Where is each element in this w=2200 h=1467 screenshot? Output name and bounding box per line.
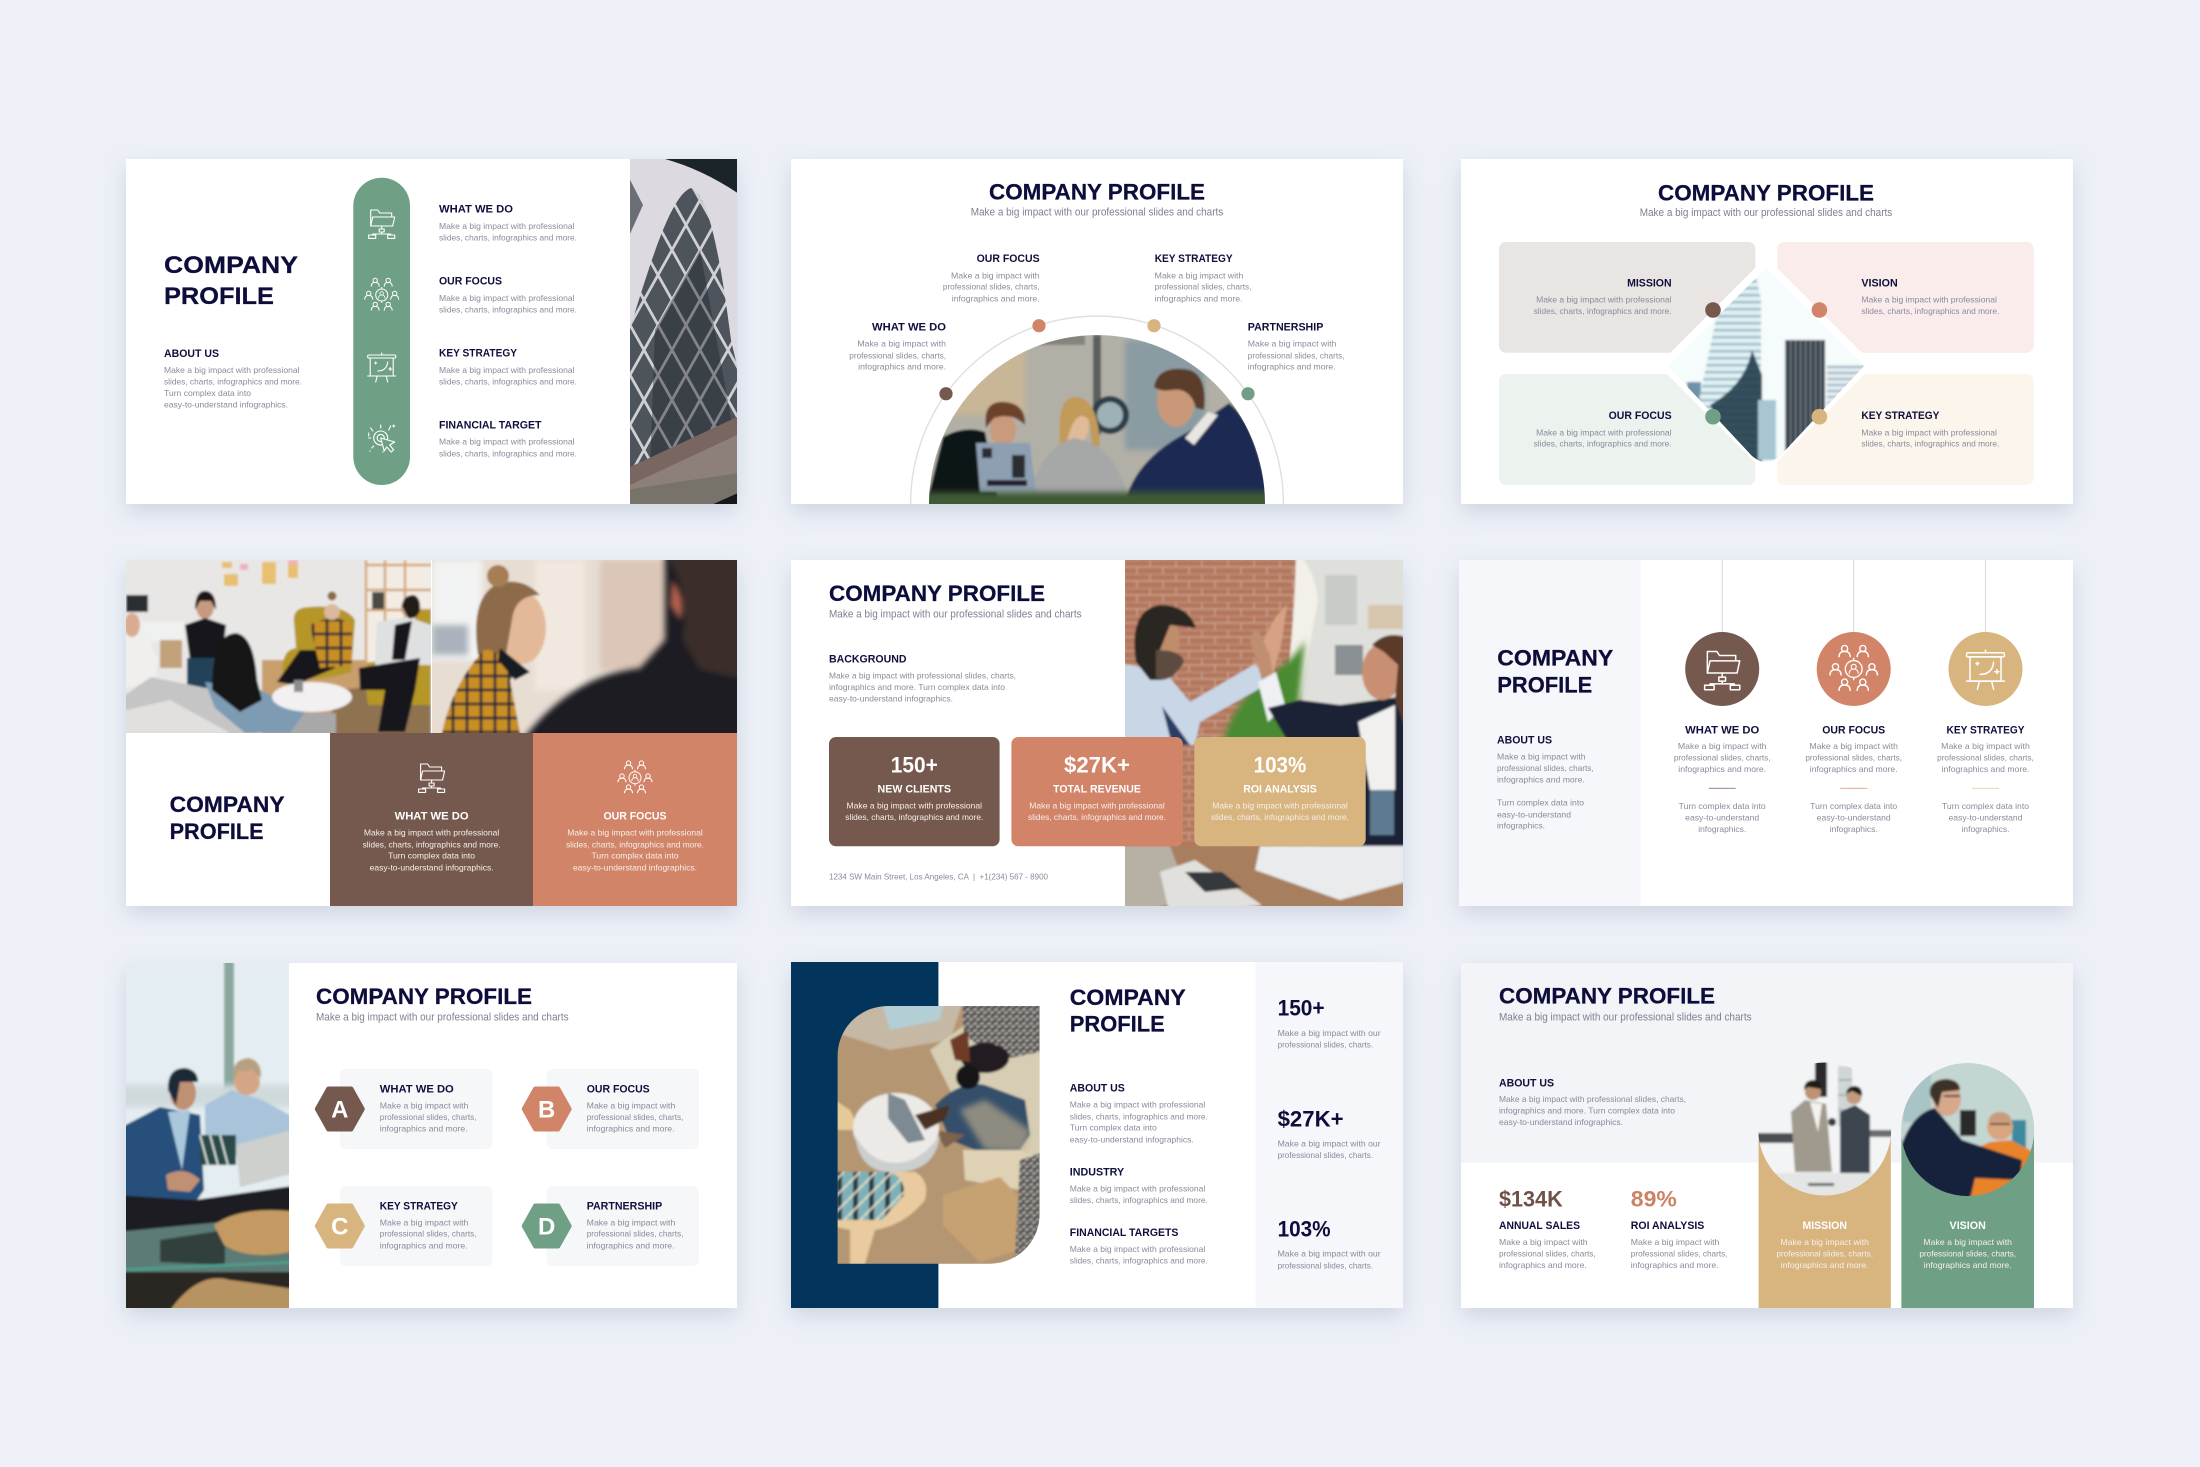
title: COMPANY PROFILE bbox=[316, 984, 532, 1009]
text block: about us: Make a big impact with bbox=[1497, 751, 1586, 761]
text block: background bbox=[829, 653, 1016, 704]
column: mission: professional slides, charts, bbox=[1776, 1248, 1873, 1258]
text block: about us: easy-to-understand infographics. bbox=[1499, 1117, 1623, 1127]
text block: what we do bbox=[439, 204, 577, 243]
panel: our focus: easy-to-understand infographics. bbox=[573, 862, 697, 872]
text block: mission bbox=[1534, 278, 1672, 316]
text block: our focus: infographics and more. bbox=[952, 293, 1040, 303]
stat: annual sales: ANNUAL SALES bbox=[1499, 1220, 1580, 1232]
text block: partnership bbox=[1248, 321, 1344, 372]
text block: key strategy: KEY STRATEGY bbox=[1861, 410, 1940, 422]
column: vision: Make a big impact with bbox=[1923, 1237, 2012, 1247]
text block: key strategy: professional slides, charts, bbox=[1155, 282, 1251, 292]
text block: our focus: professional slides, charts, bbox=[943, 282, 1040, 292]
panel: our focus: slides, charts, infographics and more. bbox=[566, 839, 704, 849]
slide 2: arc with photo bbox=[791, 159, 1403, 515]
right stats panel bbox=[1256, 962, 1403, 1308]
panel: what we do: Make a big impact with professional bbox=[364, 828, 499, 838]
photo: team at laptop bbox=[929, 335, 1265, 504]
panel: our focus: OUR FOCUS bbox=[604, 811, 666, 823]
diamond dots bbox=[1705, 302, 1827, 425]
text block: partnership: PARTNERSHIP bbox=[1248, 321, 1323, 333]
text block: industry: Make a big impact with professional bbox=[1070, 1183, 1205, 1193]
photo: office meeting bbox=[126, 560, 431, 733]
text block: about us bbox=[1499, 1078, 1686, 1127]
title: PROFILE bbox=[1070, 1012, 1165, 1037]
stat: $27K+: professional slides, charts. bbox=[1278, 1150, 1373, 1160]
text block: about us: Turn complex data into bbox=[1070, 1123, 1157, 1133]
stat: roi analysis: professional slides, charts, bbox=[1631, 1248, 1728, 1258]
column: what we do bbox=[1674, 560, 1771, 834]
stat: 103%: Make a big impact with our bbox=[1278, 1249, 1381, 1259]
photo: skyscraper bbox=[630, 159, 737, 504]
stat: 103% bbox=[1278, 1217, 1381, 1270]
text block: about us bbox=[1497, 735, 1594, 831]
text block: our focus: slides, charts, infographics and more. bbox=[1534, 439, 1672, 449]
text block: what we do: professional slides, charts, bbox=[849, 350, 946, 360]
title: Make a big impact with our professional slides and charts bbox=[971, 206, 1223, 218]
arc dots bbox=[939, 319, 1255, 400]
green pill with icons bbox=[353, 178, 410, 485]
card D: professional slides, charts, bbox=[587, 1229, 683, 1239]
text block: background: easy-to-understand infographics. bbox=[829, 694, 953, 704]
stat: annual sales: professional slides, charts, bbox=[1499, 1248, 1596, 1258]
panel: what we do: slides, charts, infographics and more. bbox=[363, 839, 501, 849]
card A: professional slides, charts, bbox=[380, 1112, 476, 1122]
text block: key strategy: Make a big impact with professional bbox=[439, 365, 575, 375]
title bbox=[164, 252, 298, 310]
text block: our focus: Make a big impact with bbox=[951, 270, 1040, 280]
white diamond bbox=[1658, 257, 1874, 473]
slide 5: stat cards bbox=[791, 550, 1413, 916]
stat: annual sales bbox=[1499, 1187, 1596, 1270]
column: vision bbox=[1901, 1063, 2034, 1308]
text block: background: infographics and more. Turn complex data into bbox=[829, 682, 1005, 692]
text block: about us: Make a big impact with professional bbox=[1070, 1100, 1205, 1110]
text block: mission: slides, charts, infographics and more. bbox=[1534, 306, 1672, 316]
card A: infographics and more. bbox=[380, 1124, 468, 1134]
text block: about us: Turn complex data into bbox=[164, 388, 251, 398]
card C: infographics and more. bbox=[380, 1240, 468, 1250]
column: our focus: OUR FOCUS bbox=[1822, 724, 1885, 736]
text block: mission: MISSION bbox=[1627, 278, 1672, 290]
stat: roi analysis: 89% bbox=[1631, 1187, 1677, 1212]
card D: D bbox=[538, 1214, 555, 1240]
column: what we do: infographics and more. bbox=[1678, 764, 1766, 774]
text block: what we do: infographics and more. bbox=[858, 362, 946, 372]
navy band bbox=[791, 962, 938, 1308]
photo: high five bbox=[1125, 560, 1403, 906]
title bbox=[316, 984, 569, 1024]
text block: about us: Turn complex data into bbox=[1497, 798, 1584, 808]
text block: vision: slides, charts, infographics and more. bbox=[1861, 306, 1999, 316]
card B bbox=[524, 1069, 699, 1149]
title bbox=[1499, 984, 1752, 1023]
stat: 103%: professional slides, charts. bbox=[1278, 1260, 1373, 1270]
card: total revenue: Make a big impact with professional bbox=[1029, 800, 1165, 810]
card D: PARTNERSHIP bbox=[587, 1201, 662, 1213]
column: mission bbox=[1758, 1062, 1892, 1308]
title: PROFILE bbox=[164, 283, 274, 310]
photo: man at laptop from above bbox=[838, 1006, 1040, 1264]
footer address: 1234 SW Main Street, Los Angeles, CA | +1(234) 567 - 8900 bbox=[829, 871, 1048, 881]
panel: what we do: Turn complex data into bbox=[388, 851, 475, 861]
card C: KEY STRATEGY bbox=[380, 1201, 458, 1213]
title: PROFILE bbox=[170, 819, 264, 844]
stat: roi analysis: Make a big impact with bbox=[1631, 1237, 1720, 1247]
text block: financial targets: Make a big impact with professional bbox=[1070, 1244, 1205, 1254]
text block: about us: slides, charts, infographics and more. bbox=[1070, 1111, 1208, 1121]
stat: roi analysis: infographics and more. bbox=[1631, 1260, 1719, 1270]
text block: financial target bbox=[439, 420, 577, 458]
photo: handshake in office bbox=[1758, 1062, 1892, 1196]
text block: key strategy: slides, charts, infographics and more. bbox=[1861, 439, 1999, 449]
text block: our focus: OUR FOCUS bbox=[977, 253, 1040, 265]
text block: financial targets: slides, charts, infographics and more. bbox=[1070, 1256, 1208, 1266]
card D: infographics and more. bbox=[587, 1240, 674, 1250]
text block: industry bbox=[1070, 1166, 1208, 1205]
card: total revenue: slides, charts, infographics and more. bbox=[1028, 812, 1166, 822]
text block: key strategy: KEY STRATEGY bbox=[1155, 253, 1233, 265]
text block: financial targets bbox=[1070, 1227, 1208, 1266]
text block: about us: slides, charts, infographics and more. bbox=[164, 376, 302, 386]
column: our focus: Turn complex data into bbox=[1810, 801, 1897, 811]
panel: what we do: WHAT WE DO bbox=[395, 811, 469, 823]
text block: about us: Make a big impact with professional slides, charts, bbox=[1499, 1094, 1686, 1104]
stat: $27K+ bbox=[1278, 1107, 1381, 1160]
text block: what we do: Make a big impact with bbox=[857, 339, 946, 349]
arc bbox=[911, 316, 1283, 504]
text block: about us: easy-to-understand infographics. bbox=[164, 400, 288, 410]
column: our focus: easy-to-understand bbox=[1817, 813, 1891, 823]
slide 8: navy band with photo bbox=[791, 962, 1403, 1316]
text block: industry: slides, charts, infographics and more. bbox=[1070, 1195, 1208, 1205]
column: our focus bbox=[1805, 560, 1902, 834]
stat: 150+ bbox=[1278, 996, 1381, 1050]
column: vision: professional slides, charts, bbox=[1919, 1248, 2016, 1258]
card A: A bbox=[331, 1096, 348, 1124]
stat: 150+: Make a big impact with our bbox=[1278, 1028, 1381, 1038]
text block: about us: Make a big impact with professional bbox=[164, 365, 300, 375]
column: key strategy: KEY STRATEGY bbox=[1946, 724, 2025, 736]
stat: 150+: professional slides, charts. bbox=[1278, 1040, 1373, 1050]
column: key strategy bbox=[1937, 560, 2034, 834]
text block: key strategy: Make a big impact with bbox=[1155, 270, 1244, 280]
column: our focus: Make a big impact with bbox=[1809, 741, 1898, 751]
card: new clients: NEW CLIENTS bbox=[878, 783, 951, 795]
text block: partnership: Make a big impact with bbox=[1248, 339, 1337, 349]
panel: our focus bbox=[533, 733, 737, 906]
text block: key strategy: Make a big impact with professional bbox=[1861, 427, 1997, 437]
text block: about us: ABOUT US bbox=[1499, 1078, 1554, 1090]
column: key strategy: Turn complex data into bbox=[1942, 801, 2029, 811]
card C: Make a big impact with bbox=[380, 1217, 469, 1227]
text block: about us bbox=[164, 348, 302, 410]
text block: about us: infographics and more. Turn complex data into bbox=[1499, 1106, 1675, 1116]
top band bbox=[1461, 963, 2073, 1163]
card: new clients bbox=[829, 737, 1000, 846]
text block: industry: INDUSTRY bbox=[1070, 1166, 1125, 1178]
text block: partnership: infographics and more. bbox=[1248, 362, 1336, 372]
stat: 150+: 150+ bbox=[1278, 996, 1325, 1021]
text block: what we do bbox=[849, 321, 946, 372]
title: COMPANY bbox=[164, 252, 298, 279]
card: new clients: slides, charts, infographics and more. bbox=[845, 812, 983, 822]
panels bbox=[1499, 242, 2034, 485]
title: COMPANY PROFILE bbox=[1499, 984, 1715, 1009]
title bbox=[971, 180, 1223, 218]
card B: infographics and more. bbox=[587, 1124, 674, 1134]
title bbox=[829, 581, 1082, 621]
card A bbox=[317, 1069, 492, 1149]
text block: about us: infographics and more. bbox=[1497, 775, 1585, 785]
stat: 103%: 103% bbox=[1278, 1217, 1331, 1242]
photo: woman speaking bbox=[432, 560, 737, 733]
stat: roi analysis: ROI ANALYSIS bbox=[1631, 1220, 1704, 1232]
text block: key strategy bbox=[1861, 410, 1999, 449]
text block: about us: ABOUT US bbox=[1497, 735, 1552, 747]
card C: C bbox=[331, 1214, 348, 1240]
text block: key strategy: KEY STRATEGY bbox=[439, 348, 518, 360]
card: roi analysis: 103% bbox=[1254, 752, 1306, 777]
card B: professional slides, charts, bbox=[587, 1112, 683, 1122]
text block: what we do: slides, charts, infographics and more. bbox=[439, 233, 577, 243]
column: key strategy: infographics and more. bbox=[1942, 764, 2029, 774]
card: new clients: Make a big impact with professional bbox=[847, 800, 982, 810]
text block: about us bbox=[1070, 1083, 1208, 1144]
card: total revenue: TOTAL REVENUE bbox=[1053, 783, 1141, 795]
title bbox=[1070, 985, 1186, 1037]
text block: background: BACKGROUND bbox=[829, 653, 907, 665]
photo: colleagues greeting bbox=[1901, 1063, 2034, 1196]
column: what we do: Make a big impact with bbox=[1678, 741, 1767, 751]
text block: about us: easy-to-understand infographics. bbox=[1070, 1134, 1194, 1144]
text block: key strategy bbox=[439, 348, 577, 387]
text block: about us: ABOUT US bbox=[164, 348, 219, 360]
text block: what we do: Make a big impact with professional bbox=[439, 221, 575, 231]
column: what we do: WHAT WE DO bbox=[1685, 724, 1760, 736]
text block: our focus: OUR FOCUS bbox=[439, 276, 502, 288]
slide 9: mission and vision bbox=[1461, 963, 2073, 1316]
column: key strategy: Make a big impact with bbox=[1941, 741, 2030, 751]
column: key strategy: professional slides, charts, bbox=[1937, 753, 2034, 763]
panel: our focus: Turn complex data into bbox=[592, 851, 679, 861]
card C bbox=[317, 1186, 492, 1266]
title: COMPANY bbox=[170, 792, 285, 817]
title: COMPANY bbox=[1070, 985, 1186, 1010]
card B: OUR FOCUS bbox=[587, 1084, 650, 1096]
slide 3: four panels and diamond bbox=[1461, 159, 2073, 512]
title bbox=[1640, 180, 1892, 219]
text block: financial target: Make a big impact with professional bbox=[439, 437, 575, 447]
title: COMPANY PROFILE bbox=[989, 180, 1205, 205]
text block: our focus bbox=[943, 253, 1040, 303]
slide 1: vertical pill bbox=[126, 150, 745, 515]
column: what we do: easy-to-understand bbox=[1685, 813, 1759, 823]
title: Make a big impact with our professional slides and charts bbox=[316, 1012, 569, 1024]
text block: our focus: Make a big impact with professional bbox=[439, 293, 575, 303]
text block: our focus: OUR FOCUS bbox=[1609, 410, 1672, 422]
stat: $27K+: Make a big impact with our bbox=[1278, 1138, 1381, 1148]
column: what we do: Turn complex data into bbox=[1679, 801, 1766, 811]
column: our focus: infographics. bbox=[1830, 824, 1878, 834]
title: COMPANY PROFILE bbox=[1658, 180, 1874, 205]
text block: our focus bbox=[1534, 410, 1672, 449]
panel: what we do: easy-to-understand infographics. bbox=[370, 862, 494, 872]
text block: key strategy: slides, charts, infographics and more. bbox=[439, 377, 577, 387]
text block: financial targets: FINANCIAL TARGETS bbox=[1070, 1227, 1178, 1239]
column: mission: MISSION bbox=[1802, 1220, 1847, 1232]
text block: our focus: slides, charts, infographics and more. bbox=[439, 305, 577, 315]
card: roi analysis: Make a big impact with professional bbox=[1212, 800, 1348, 810]
text block: our focus: Make a big impact with professional bbox=[1536, 427, 1672, 437]
column: mission: Make a big impact with bbox=[1780, 1237, 1869, 1247]
card A: WHAT WE DO bbox=[380, 1084, 454, 1096]
card: total revenue bbox=[1011, 737, 1183, 846]
text block: our focus bbox=[439, 276, 577, 315]
text block: about us: professional slides, charts, bbox=[1497, 763, 1594, 773]
column: key strategy: easy-to-understand bbox=[1948, 813, 2023, 823]
text block: key strategy bbox=[1155, 253, 1251, 303]
photo: towers bbox=[1668, 268, 1864, 462]
column: mission: infographics and more. bbox=[1781, 1260, 1869, 1270]
stat: roi analysis bbox=[1631, 1187, 1728, 1270]
card A: Make a big impact with bbox=[380, 1100, 469, 1110]
stat: annual sales: infographics and more. bbox=[1499, 1260, 1587, 1270]
stat: annual sales: $134K bbox=[1499, 1187, 1563, 1212]
left panel bbox=[1459, 560, 1641, 906]
card D bbox=[524, 1186, 699, 1266]
title: COMPANY PROFILE bbox=[829, 581, 1045, 606]
text block: background: Make a big impact with professional slides, charts, bbox=[829, 670, 1016, 680]
stat: $27K+: $27K+ bbox=[1278, 1107, 1344, 1132]
column: what we do: professional slides, charts, bbox=[1674, 753, 1771, 763]
column: key strategy: infographics. bbox=[1962, 824, 2010, 834]
title: Make a big impact with our professional slides and charts bbox=[1640, 207, 1892, 219]
column: our focus: infographics and more. bbox=[1810, 764, 1898, 774]
text block: vision bbox=[1861, 278, 1999, 316]
card B: Make a big impact with bbox=[587, 1100, 676, 1110]
text block: what we do: WHAT WE DO bbox=[439, 204, 513, 216]
panel: our focus: Make a big impact with professional bbox=[567, 828, 703, 838]
column: what we do: infographics. bbox=[1698, 824, 1746, 834]
column: our focus: professional slides, charts, bbox=[1805, 753, 1902, 763]
slide 7: hexagon cards bbox=[116, 953, 737, 1318]
card C: professional slides, charts, bbox=[380, 1229, 476, 1239]
card: roi analysis bbox=[1194, 737, 1366, 846]
card: roi analysis: slides, charts, infographics and more. bbox=[1211, 812, 1349, 822]
text block: about us: easy-to-understand bbox=[1497, 809, 1571, 819]
stat: annual sales: Make a big impact with bbox=[1499, 1237, 1588, 1247]
text block: mission: Make a big impact with professional bbox=[1536, 295, 1672, 305]
text block: financial target: slides, charts, infographics and more. bbox=[439, 448, 577, 458]
text block: about us: ABOUT US bbox=[1070, 1083, 1125, 1095]
title: Make a big impact with our professional slides and charts bbox=[1499, 1011, 1752, 1023]
slide 6: hanging circles bbox=[1459, 560, 2073, 914]
slide 4: photos over colour blocks bbox=[116, 550, 747, 914]
column: vision: VISION bbox=[1950, 1220, 1986, 1232]
text block: financial target: FINANCIAL TARGET bbox=[439, 420, 542, 432]
column: vision: infographics and more. bbox=[1924, 1260, 2012, 1270]
text block: what we do: WHAT WE DO bbox=[872, 321, 946, 333]
title: COMPANY bbox=[1497, 646, 1613, 671]
title: Make a big impact with our professional slides and charts bbox=[829, 609, 1082, 621]
text block: key strategy: infographics and more. bbox=[1155, 293, 1242, 303]
text block: partnership: professional slides, charts, bbox=[1248, 350, 1344, 360]
title bbox=[170, 792, 285, 844]
photo: two businessmen bbox=[126, 963, 289, 1308]
card B: B bbox=[538, 1096, 555, 1124]
card: new clients: 150+ bbox=[891, 752, 938, 777]
text block: vision: Make a big impact with professional bbox=[1861, 295, 1997, 305]
card D: Make a big impact with bbox=[587, 1217, 676, 1227]
title: PROFILE bbox=[1497, 672, 1592, 697]
text block: about us: infographics. bbox=[1497, 821, 1545, 831]
card: roi analysis: ROI ANALYSIS bbox=[1243, 783, 1317, 795]
text block: vision: VISION bbox=[1861, 278, 1898, 290]
title bbox=[1497, 646, 1613, 697]
card: total revenue: $27K+ bbox=[1064, 752, 1130, 777]
panel: what we do bbox=[330, 733, 533, 906]
